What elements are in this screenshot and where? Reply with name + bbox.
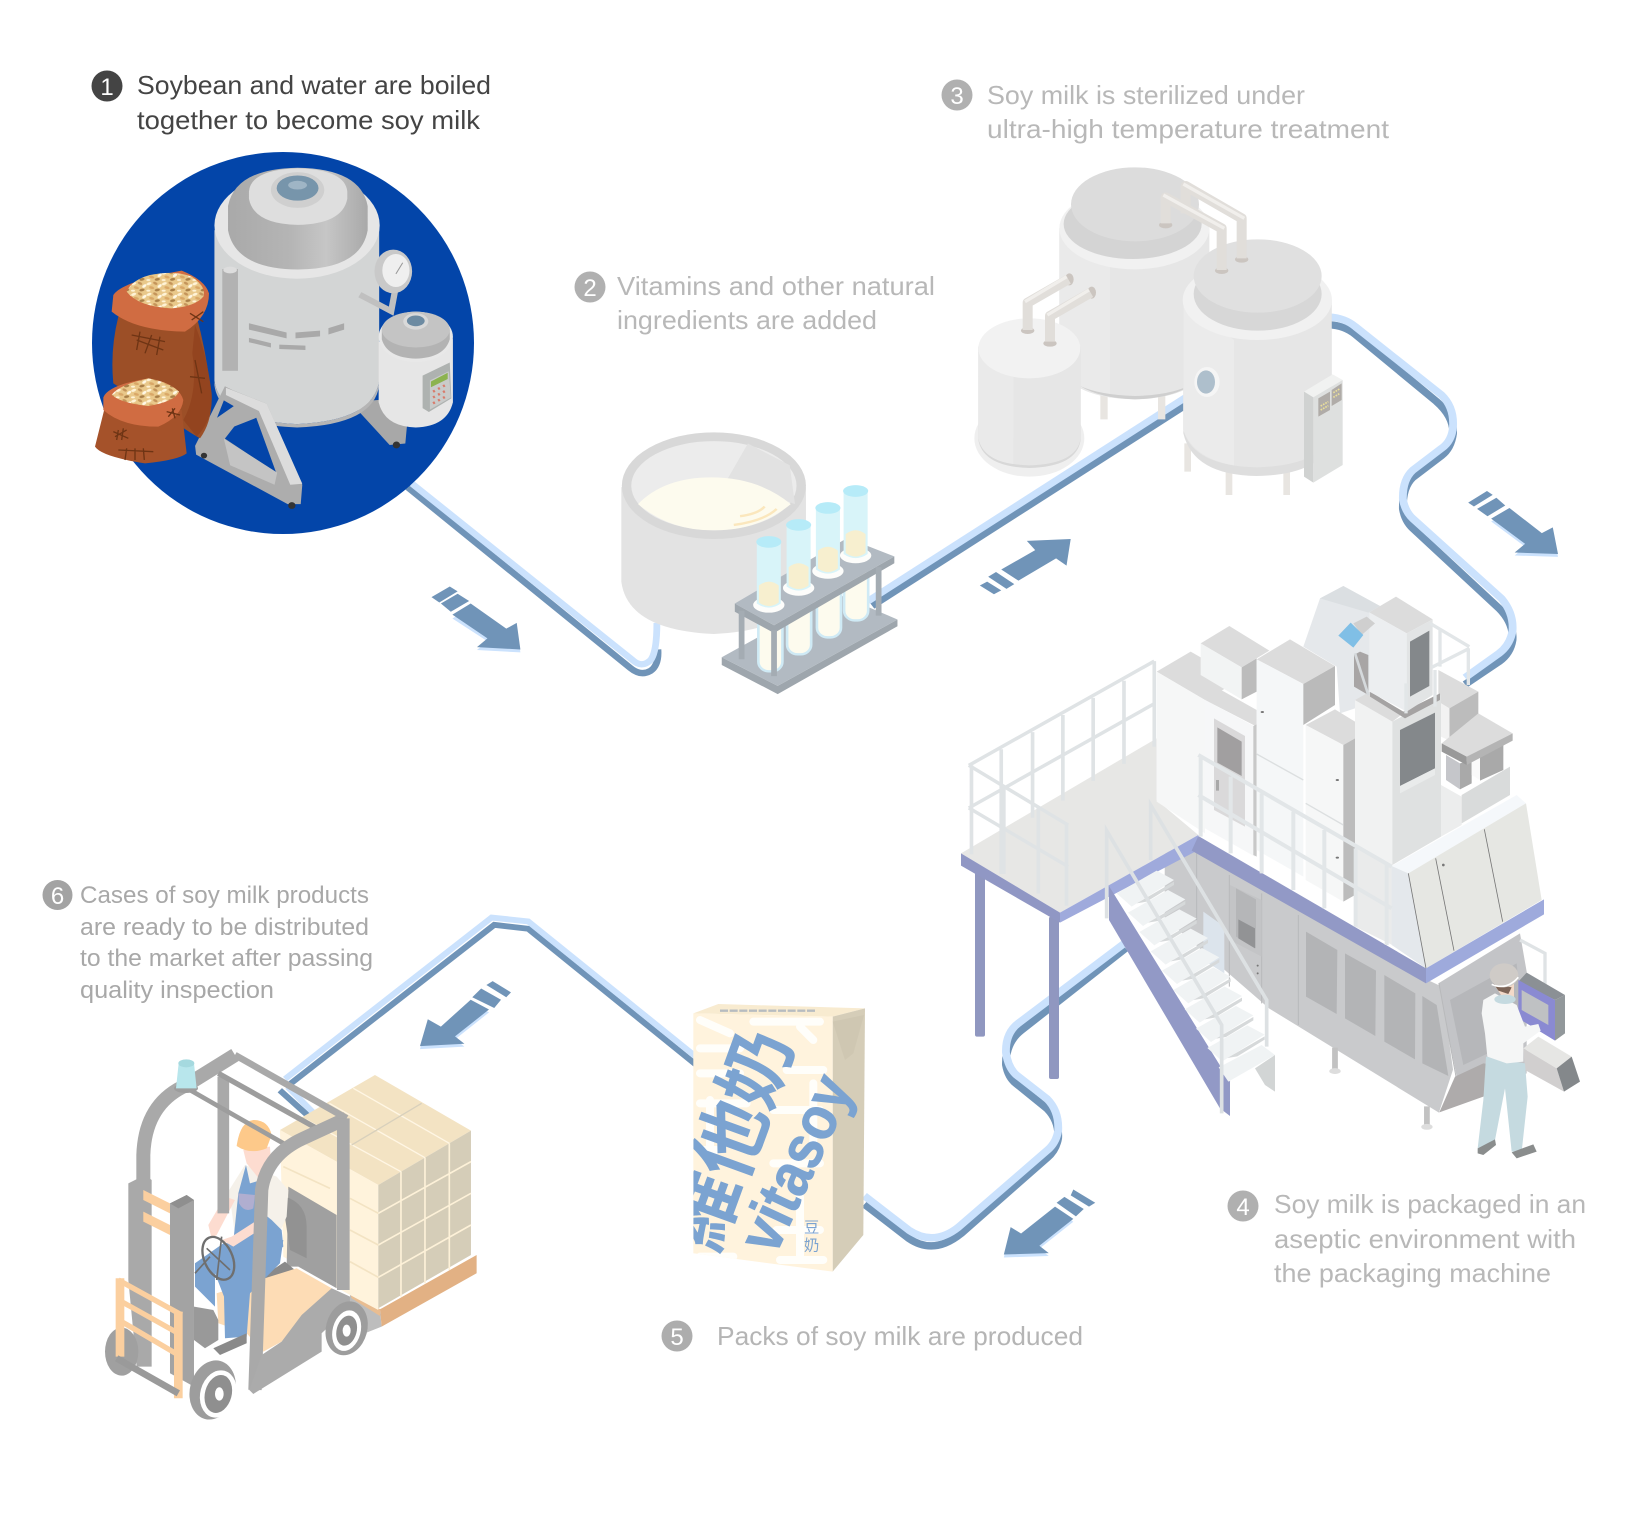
fork carriage [117,1278,182,1398]
illustration: sterilization tanks [974,167,1343,495]
pipeline: step 4 to step 5 [864,942,1126,1246]
rear housing [1303,586,1380,713]
step 3 text: ultra-high temperature treatment [987,114,1390,144]
pallet [350,1255,477,1333]
step 3 badge [942,80,972,110]
dosing unit [1338,617,1375,695]
beacon [174,1059,198,1093]
step 2 text: Vitamins and other natural [617,271,935,301]
step 1 badge: 1 [100,74,114,101]
arrow: flow to step 5 [1004,1189,1095,1257]
step 2 text [617,271,935,335]
left column [1157,652,1240,833]
step 1 text: Soybean and water are boiled [137,70,491,100]
worker [1478,963,1541,1158]
step 2 text: ingredients are added [617,305,877,335]
step 4 text: the packaging machine [1274,1258,1551,1288]
step 4 caption [1228,1189,1586,1288]
steering wheel [195,1232,241,1285]
illustration: soy milk pack [693,1004,865,1272]
operator [195,1120,288,1355]
arrow: flow to step 4 [1468,491,1558,557]
tower A [1257,639,1335,877]
tower C [1355,692,1441,945]
support frame [195,386,302,509]
control panel and conveyor [1478,940,1580,1158]
step 6 badge [42,880,72,910]
stacked cases [280,1075,471,1310]
hood [1392,795,1542,968]
illustration: test tubes on rack [722,485,897,694]
cab body [249,1288,350,1394]
step 3 caption [942,80,1390,144]
blue circle background [92,152,474,534]
illustration: boiling tank on blue circle [92,152,474,534]
pack logo: English name: vitasoy [725,1064,867,1263]
control cabinet [1304,374,1343,483]
soybean sacks [95,271,212,463]
lower machine door [1167,852,1262,1003]
tower D [1369,597,1440,718]
large rear tank [1059,167,1209,419]
tower B [1306,709,1355,902]
boiling tank [195,168,453,509]
machine towers [1157,586,1544,983]
step 6 text [80,882,373,1004]
lower machine right end and panels [1298,915,1527,1112]
step 2 badge [574,272,606,302]
step 5 badge [662,1320,692,1352]
lower machine body [1165,847,1453,1130]
pipeline: step 1 to step 2 [407,484,658,673]
step 1 text [137,70,491,135]
step 6 badge: 6 [51,883,64,910]
illustration: soy milk pack: 奶 [804,1234,819,1256]
step 5 text: Packs of soy milk are produced [717,1321,1083,1351]
arrow: flow to step 2 [431,586,520,652]
pack label: 豆 [804,1216,819,1238]
step 6 text: Cases of soy milk products [80,882,369,909]
top box [1201,626,1269,699]
illustration: forklift with pallet of cases [105,1055,477,1425]
staircase [1107,805,1275,1116]
step 2 caption [574,271,935,335]
cab frame [143,1055,347,1390]
step 6 text: quality inspection [80,977,274,1004]
step 4 text: Soy milk is packaged in an [1274,1189,1586,1219]
step 5 badge: 5 [670,1324,684,1351]
step 6 caption [42,880,373,1004]
small tank [379,312,453,428]
right stack [1438,670,1513,837]
arrow: flow to step 6 [420,981,511,1049]
mast [128,1175,218,1387]
connecting pipes [1021,184,1248,347]
illustration: packaging machine [961,586,1580,1158]
small left tank [974,318,1084,477]
support beam [1192,836,1544,983]
step 2 badge: 2 [583,275,597,302]
step 6 text: are ready to be distributed [80,914,369,941]
step 4 text: aseptic environment with [1274,1224,1576,1254]
step 4 badge: 4 [1236,1194,1250,1221]
arrow: flow to step 3 [980,539,1071,594]
step 1 caption [92,70,491,135]
right front wheel [183,1355,242,1425]
platform railings [969,661,1154,906]
left front wheel [105,1328,138,1376]
tower railings [1198,623,1469,945]
pack logo: Chinese name: 維他奶 [635,1012,815,1262]
step 4 text [1274,1189,1586,1288]
door column [1205,689,1257,857]
pipeline: step 2 to step 3 [868,397,1186,606]
step 1 text: together to become soy milk [137,105,481,135]
platform edge beam [961,835,1198,923]
cab floor [217,1268,332,1352]
step 3 badge: 3 [950,83,964,110]
step 3 text: Soy milk is sterilized under [987,80,1305,110]
step 1 badge [92,70,122,102]
rear wheel [320,1297,374,1360]
step 6 text: to the market after passing [80,945,373,972]
illustration: mixing vat [621,432,806,634]
rear panel and seat [247,1187,337,1295]
pipeline: step 3 to step 4 [1329,317,1513,684]
platform legs [975,872,1059,1079]
right tank [1183,239,1332,495]
step 3 text [987,80,1390,144]
pipeline: step 5 to step 6 [280,918,696,1116]
platform deck [961,738,1198,1079]
step 5 caption [662,1320,1083,1352]
step 4 badge [1228,1190,1258,1222]
